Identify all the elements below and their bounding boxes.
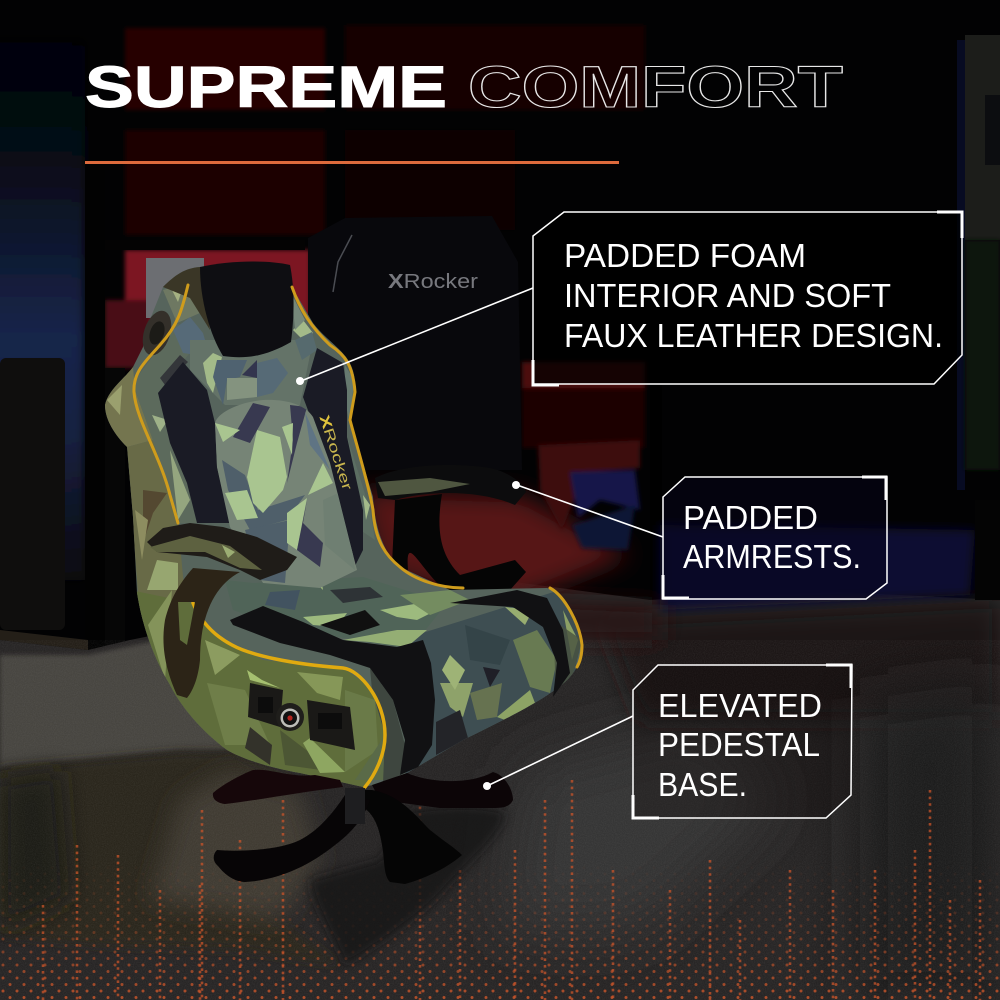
title: COMFORT [468,55,843,120]
control panel [248,683,355,750]
chair body [105,267,582,787]
callout: padded armrests: PADDED [683,499,818,536]
callout: elevated pedestal base [483,665,852,818]
foreground chair [100,261,582,965]
ottoman [538,440,640,550]
headrest [163,261,294,357]
orange dot texture [0,780,1000,1000]
callout: padded foam interior: PADDED FOAM [564,237,806,274]
floor carpet [0,490,1000,1000]
callout: padded foam interior: INTERIOR AND SOFT [564,277,891,314]
yellow piping [134,285,582,787]
callout: elevated pedestal base: PEDESTAL [658,726,820,763]
title: SUPREME [85,55,447,120]
callout: padded foam interior [296,212,962,385]
near armrest [147,523,297,698]
background chair with XRocker logo: XRocker [388,271,478,293]
camouflage pattern [100,283,582,790]
seat cushion [225,567,470,647]
background chair with XRocker logo [308,216,522,470]
black side bolsters [158,348,363,570]
title underline [85,161,619,164]
pedestal base [213,770,513,965]
callout: padded foam interior: FAUX LEATHER DESIGN. [564,317,943,354]
far armrest and legs [375,465,526,590]
XRocker side logo: X Rocker [316,413,356,492]
callout: padded armrests: ARMRESTS. [683,538,861,575]
center back pad [215,400,357,588]
callout: padded armrests [512,477,887,599]
title [85,55,843,120]
speaker [138,307,176,359]
callout: elevated pedestal base: ELEVATED [658,687,822,724]
seat front section [400,590,582,775]
seat side panel [130,590,385,790]
callout: elevated pedestal base: BASE. [658,766,747,803]
seat black bands [230,590,570,775]
